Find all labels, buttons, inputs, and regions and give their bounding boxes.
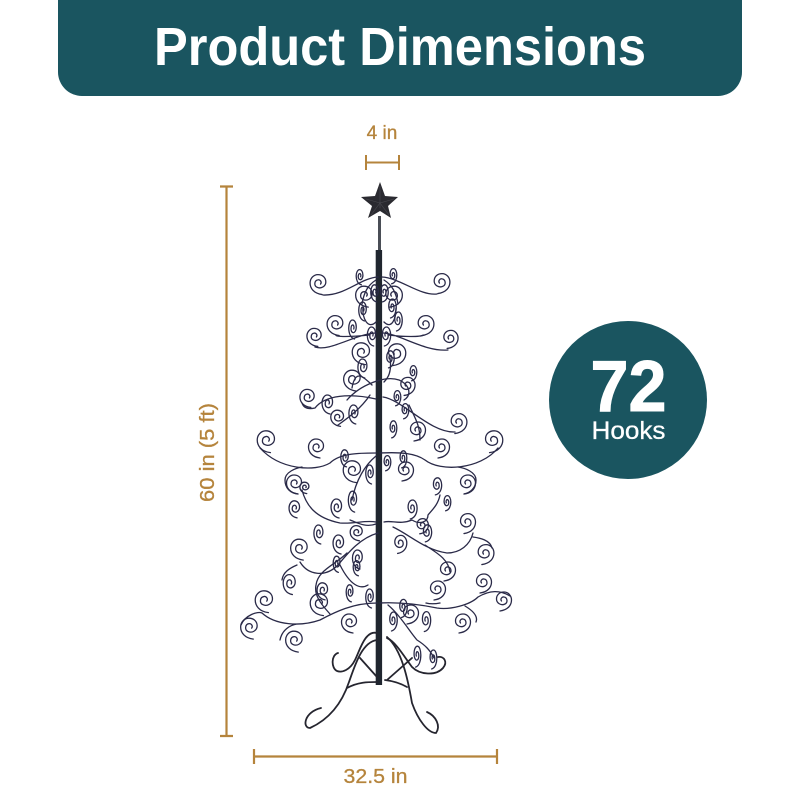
dimension: top width 4 in: 4 in	[367, 123, 397, 144]
tree illustration	[241, 182, 512, 733]
tier 4 branches	[257, 431, 503, 523]
badge: 72 hooks	[549, 321, 707, 479]
dimension: height 60 in (5 ft)	[197, 186, 233, 736]
badge: 72 hooks: Hooks	[592, 417, 666, 445]
tier 1 branches	[310, 269, 450, 307]
center pole	[376, 216, 382, 685]
tier 3 branches	[300, 351, 467, 441]
tree stand legs	[305, 633, 445, 733]
badge: 72 hooks: 72	[590, 347, 666, 427]
header banner	[58, 0, 742, 96]
tier 5 branches	[282, 478, 494, 595]
dimension: base width 32.5 in	[254, 749, 497, 788]
title: Product Dimensions	[154, 17, 646, 77]
dimension: top width 4 in	[366, 123, 399, 170]
tier 2 branches	[307, 299, 458, 366]
tier 6 branches	[241, 553, 512, 669]
dimension: base width 32.5 in: 32.5 in	[344, 766, 408, 788]
icon: star topper	[361, 182, 398, 218]
dimension: height 60 in (5 ft): 60 in (5 ft)	[197, 403, 219, 502]
